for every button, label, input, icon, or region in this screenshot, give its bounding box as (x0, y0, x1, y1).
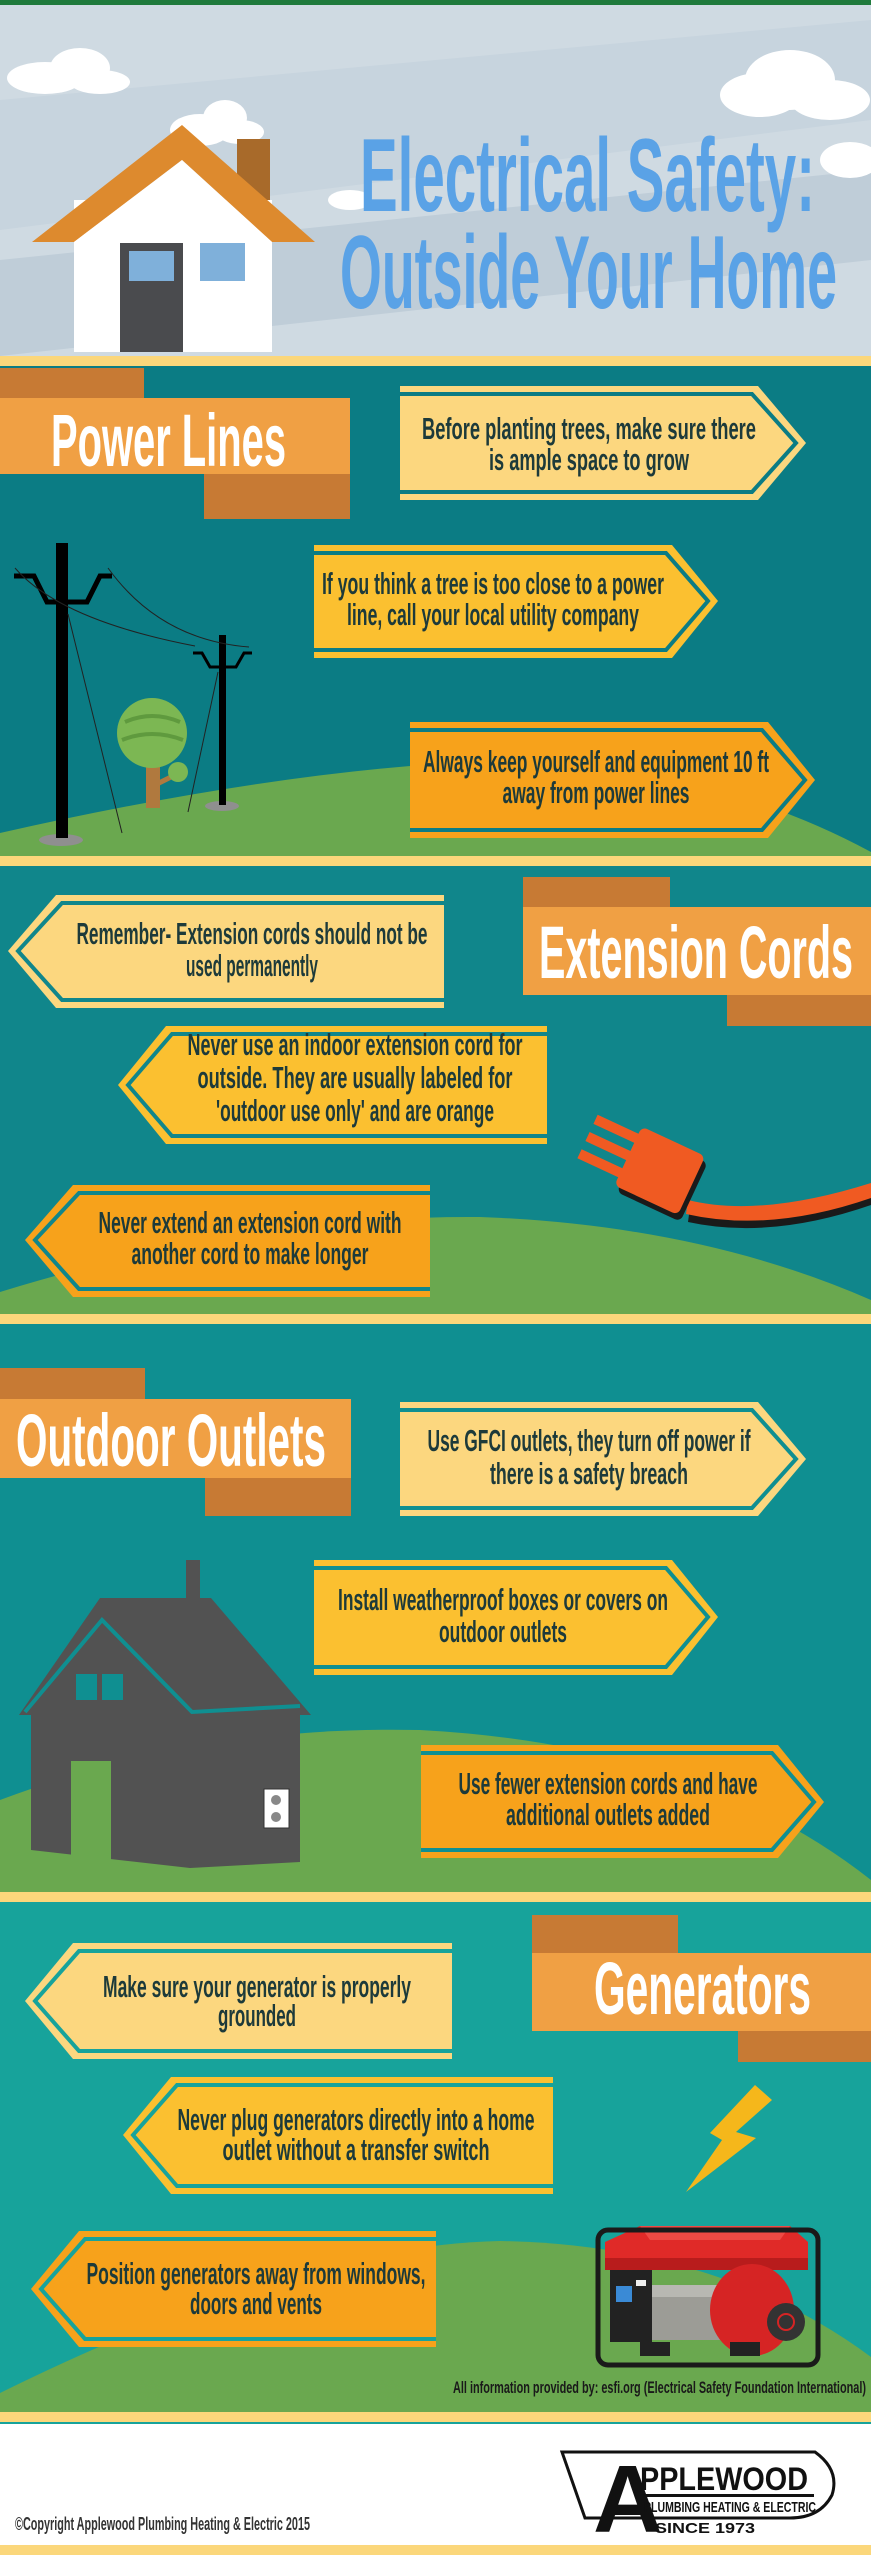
heading: Outdoor Outlets (0, 1368, 351, 1516)
arrow: indoor cords: Never use an indoor extension cord for (188, 1027, 522, 1062)
arrow: grounded: Make sure your generator is properly (103, 1969, 411, 2004)
arrow: fewer cords (421, 1745, 824, 1858)
arrow: keep 10 ft (410, 722, 815, 838)
copyright: ©Copyright Applewood Plumbing Heating & Electric 2015 (15, 2514, 310, 2534)
logo: Applewood: SINCE 1973 (655, 2520, 755, 2537)
arrow: not permanent (8, 895, 444, 1008)
heading: Power Lines: Power Lines (51, 399, 286, 482)
icon: outlet (264, 1789, 289, 1828)
arrow: don't extend: Never extend an extension cord with (98, 1205, 402, 1240)
logo: Applewood: PPLEWOOD (640, 2461, 808, 2497)
hill (0, 2241, 871, 2412)
arrow: keep 10 ft: away from power lines (502, 775, 690, 810)
icon: house (32, 125, 315, 352)
clouds (7, 48, 871, 210)
arrow: GFCI: there is a safety breach (490, 1456, 688, 1491)
arrow: don't extend (25, 1185, 430, 1297)
arrow: grounded: grounded (218, 1998, 296, 2033)
arrow: don't extend: another cord to make longer (132, 1236, 368, 1271)
icon: tree (117, 698, 188, 808)
arrow: not permanent: used permanently (186, 948, 318, 983)
arrow: indoor cords: outside. They are usually labeled for (198, 1060, 512, 1095)
arrow: transfer switch: outlet without a transfer switch (222, 2132, 490, 2167)
arrow: weatherproof: outdoor outlets (439, 1614, 567, 1649)
arrow: transfer switch (123, 2077, 553, 2194)
logo: Applewood: A (593, 2446, 662, 2553)
heading: Extension Cords (523, 877, 871, 1026)
icon: plug (571, 1108, 871, 1228)
arrow: grounded (25, 1943, 452, 2059)
arrow: position away: Position generators away from windows, (86, 2256, 426, 2291)
hill (0, 1217, 871, 1314)
heading: Power Lines (0, 368, 350, 519)
arrow: call utility: line, call your local utility company (347, 597, 639, 632)
arrow: call utility (314, 545, 718, 658)
arrow: GFCI (400, 1402, 806, 1516)
heading: Outdoor Outlets: Outdoor Outlets (16, 1399, 326, 1482)
arrow: indoor cords (118, 1026, 547, 1144)
hill (0, 1730, 871, 1892)
header sky background (0, 0, 871, 356)
panel: generators (0, 1902, 871, 2412)
icon: lightning (686, 2085, 772, 2192)
logo: Applewood (562, 2446, 834, 2553)
panel: outdoor outlets (0, 1324, 871, 1892)
heading: Generators (532, 1915, 871, 2062)
icon: gray house (19, 1560, 311, 1868)
footer (15, 2446, 834, 2553)
arrow: trees spacing: is ample space to grow (489, 442, 690, 477)
arrow: trees spacing (400, 386, 806, 500)
panel: extension cords (0, 866, 871, 1316)
arrow: fewer cords: additional outlets added (506, 1797, 710, 1832)
panel: power lines (0, 366, 871, 856)
icon: generator (598, 2226, 818, 2365)
arrow: transfer switch: Never plug generators directly into a home (178, 2102, 534, 2137)
arrow: position away: doors and vents (190, 2286, 322, 2321)
icon: power poles (14, 543, 252, 846)
arrow: position away (31, 2231, 436, 2347)
arrow: weatherproof (314, 1560, 718, 1675)
hill (0, 760, 871, 856)
title (340, 118, 837, 331)
arrow: indoor cords: 'outdoor use only' and are orange (216, 1093, 494, 1128)
arrow: not permanent: Remember- Extension cords should not be (76, 916, 428, 951)
